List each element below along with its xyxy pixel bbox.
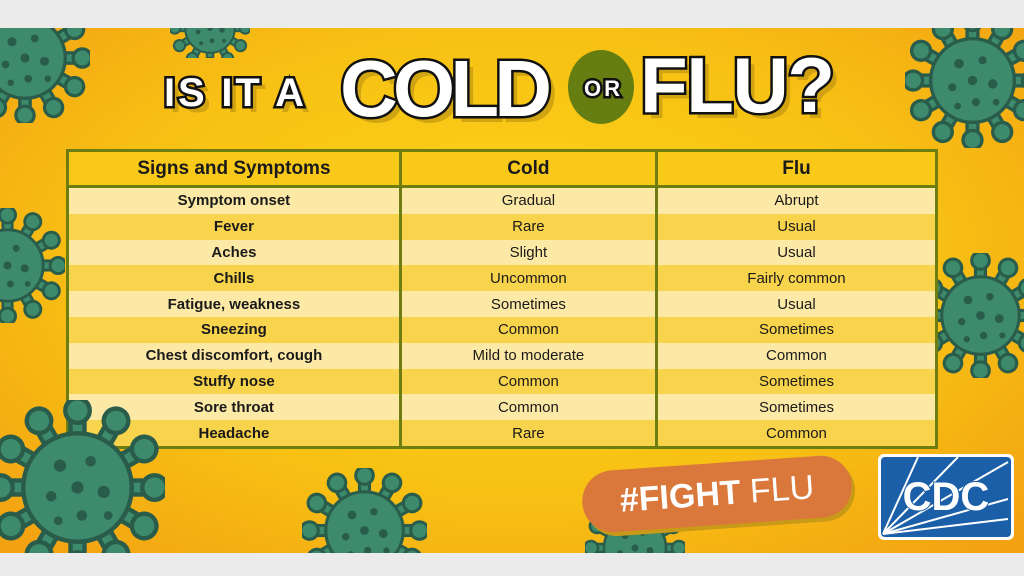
table: Stuffy nose (193, 373, 275, 390)
table: Rare (512, 218, 545, 235)
table: Common (498, 373, 559, 390)
table: Usual (777, 296, 816, 313)
table: Flu (782, 158, 811, 178)
logo: CDC: CDC (903, 475, 989, 519)
table: Aches (211, 244, 256, 261)
title: green circle (568, 50, 634, 124)
icon: virus top small (170, 28, 250, 58)
table: Fever (214, 218, 254, 235)
title: COLD (340, 44, 552, 133)
icon: virus top-left (0, 28, 90, 123)
icon: virus bottom-center small (302, 468, 427, 553)
table: Signs and Symptoms (137, 158, 331, 178)
table: Gradual (502, 192, 555, 209)
title: IS IT A (170, 77, 310, 121)
table: Chills (214, 270, 254, 287)
table: Rare (512, 425, 545, 442)
icon: virus top-right (905, 28, 1024, 148)
table: Abrupt (774, 192, 819, 209)
title: FLU? (640, 41, 835, 129)
table: Slight (510, 244, 547, 261)
icon: virus bottom-left (0, 400, 165, 553)
table: Common (498, 399, 559, 416)
table: Fairly common (747, 270, 846, 287)
table: Uncommon (490, 270, 567, 287)
table: Sore throat (194, 399, 274, 416)
icon: virus left mid (0, 208, 65, 323)
table: Usual (777, 244, 816, 261)
icon: virus behind bandage (585, 522, 685, 553)
badge: #FIGHT FLU bandage: #FIGHT FLU (619, 468, 815, 520)
table: Cold (507, 158, 550, 178)
table: Common (766, 347, 827, 364)
table: Fatigue, weakness (168, 296, 300, 313)
title: COLD (346, 50, 558, 139)
table: Sneezing (201, 321, 267, 338)
table: Sometimes (759, 321, 834, 338)
table: Mild to moderate (473, 347, 584, 364)
badge: #FIGHT FLU bandage (580, 454, 854, 534)
title: FLU? (646, 47, 841, 135)
table (66, 149, 938, 449)
table: Sometimes (759, 399, 834, 416)
table: Sometimes (759, 373, 834, 390)
table: Symptom onset (178, 192, 290, 209)
table: Usual (777, 218, 816, 235)
title: OR (584, 76, 620, 101)
table: Sometimes (491, 296, 566, 313)
table: Headache (198, 425, 269, 442)
table: Chest discomfort, cough (146, 347, 322, 364)
title (164, 41, 841, 139)
table: Common (766, 425, 827, 442)
title: IS IT A (164, 71, 304, 115)
table: Common (498, 321, 559, 338)
gray bottom band (0, 553, 1024, 576)
icon: virus right mid (938, 253, 1024, 378)
logo: CDC (878, 454, 1014, 540)
